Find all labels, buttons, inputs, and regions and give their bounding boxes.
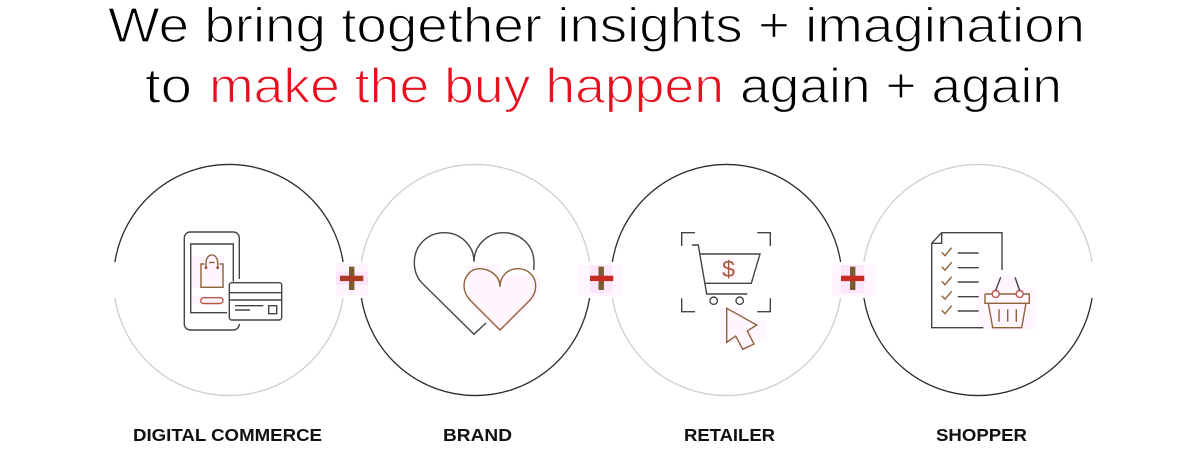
icon: shopping cart with cursor <box>682 233 770 351</box>
plus sign 2 <box>578 265 622 296</box>
icon: shopping cart with cursor: $ <box>722 256 735 282</box>
label: retailer: RETAILER <box>684 425 775 445</box>
title: We bring together insights + imagination <box>108 0 1085 53</box>
label: digital commerce: DIGITAL COMMERCE <box>133 425 322 445</box>
panel: retailer <box>612 164 841 445</box>
plus sign 1 <box>336 263 368 296</box>
label: brand: BRAND <box>443 425 512 445</box>
icon: checklist and basket <box>932 233 1036 330</box>
panel: shopper <box>864 164 1092 445</box>
title: make the buy happen <box>209 60 724 114</box>
panel: brand <box>361 164 590 445</box>
plus sign 3 <box>832 265 876 296</box>
title: again + again <box>740 60 1062 114</box>
icon: two hearts <box>414 233 540 334</box>
panel: digital commerce <box>115 164 343 445</box>
label: shopper: SHOPPER <box>936 425 1027 445</box>
title <box>108 0 1085 114</box>
title: to <box>145 60 192 114</box>
icon: phone with shopping bag and credit card <box>184 232 282 330</box>
